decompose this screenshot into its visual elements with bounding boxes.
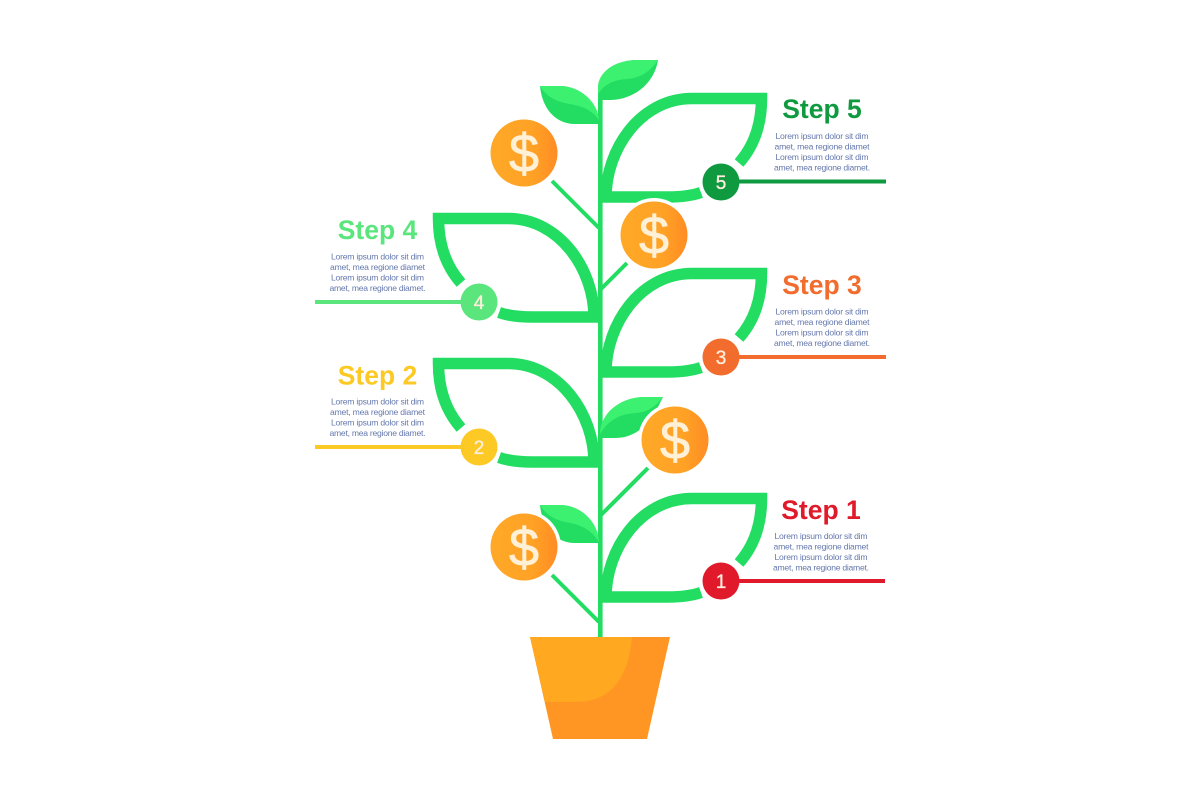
step 5 text: [774, 94, 870, 172]
step 3 text: Step 3: [782, 270, 862, 300]
step 1 marker: 1: [716, 572, 726, 593]
step 1 text: Lorem ipsum dolor sit dim: [774, 531, 868, 541]
step 3 marker: [698, 334, 886, 380]
step 1 marker: [698, 558, 885, 604]
step 2 text: Step 2: [338, 360, 417, 390]
step 5 text: Step 5: [782, 94, 862, 124]
step 3 marker: 3: [716, 348, 726, 369]
middle right leaf: [600, 397, 663, 438]
coin 4: $: [509, 518, 539, 578]
step 3 text: amet, mea regione diamet: [774, 317, 870, 327]
plant stem: [598, 100, 603, 638]
coin 4: [487, 510, 561, 584]
step 5 text: Lorem ipsum dolor sit dim: [776, 152, 868, 162]
step 1 text: [773, 495, 869, 572]
lower left leaf: [540, 505, 599, 543]
coin 1: $: [509, 124, 539, 184]
step 5 text: Lorem ipsum dolor sit dim: [776, 131, 868, 141]
coin 3: [638, 403, 712, 477]
top left leaf: [540, 86, 599, 124]
coin 3: $: [660, 411, 690, 471]
step 2 text: [330, 360, 426, 438]
step 2 text: Lorem ipsum dolor sit dim: [331, 418, 424, 428]
step 4 text: [330, 215, 426, 293]
step 1 text: amet, mea regione diamet.: [773, 562, 869, 572]
step 3 text: amet, mea regione diamet.: [774, 338, 870, 348]
step 4 text: Step 4: [338, 215, 418, 245]
step 4 text: Lorem ipsum dolor sit dim: [331, 252, 424, 262]
step 1 text: Step 1: [781, 495, 861, 525]
step 4 text: amet, mea regione diamet.: [330, 283, 426, 293]
step 5 marker: 5: [716, 173, 726, 194]
step 5 text: amet, mea regione diamet.: [774, 162, 870, 172]
coin 2: $: [639, 206, 669, 266]
pot: [530, 637, 670, 739]
top right leaf: [598, 60, 658, 100]
leaf outline: step 4: [438, 218, 600, 317]
leaf outline: step 2: [438, 364, 600, 462]
step 4 text: amet, mea regione diamet: [330, 262, 426, 272]
step 3 text: [774, 270, 870, 348]
step 5 text: amet, mea regione diamet: [774, 142, 870, 152]
step 2 text: amet, mea regione diamet: [330, 407, 426, 417]
coin 1: [487, 116, 561, 190]
step 2 text: Lorem ipsum dolor sit dim: [331, 396, 424, 406]
step 3 text: Lorem ipsum dolor sit dim: [776, 306, 868, 316]
step 3 text: Lorem ipsum dolor sit dim: [776, 328, 868, 338]
step 2 text: amet, mea regione diamet.: [330, 428, 426, 438]
leaf outline: step 5: [600, 98, 762, 197]
step 1 text: amet, mea regione diamet: [774, 542, 869, 552]
leaf outline: step 1: [600, 498, 762, 597]
step 4 text: Lorem ipsum dolor sit dim: [331, 272, 424, 282]
step 4 marker: [315, 280, 502, 324]
step 1 text: Lorem ipsum dolor sit dim: [774, 552, 868, 562]
branches to coins: [552, 181, 648, 622]
step 5 marker: [698, 160, 886, 204]
step 2 marker: 2: [474, 438, 484, 459]
step 2 marker: [315, 424, 502, 470]
step 4 marker: 4: [474, 293, 485, 314]
leaf outline: step 3: [600, 274, 762, 372]
coin 2: [617, 198, 691, 272]
